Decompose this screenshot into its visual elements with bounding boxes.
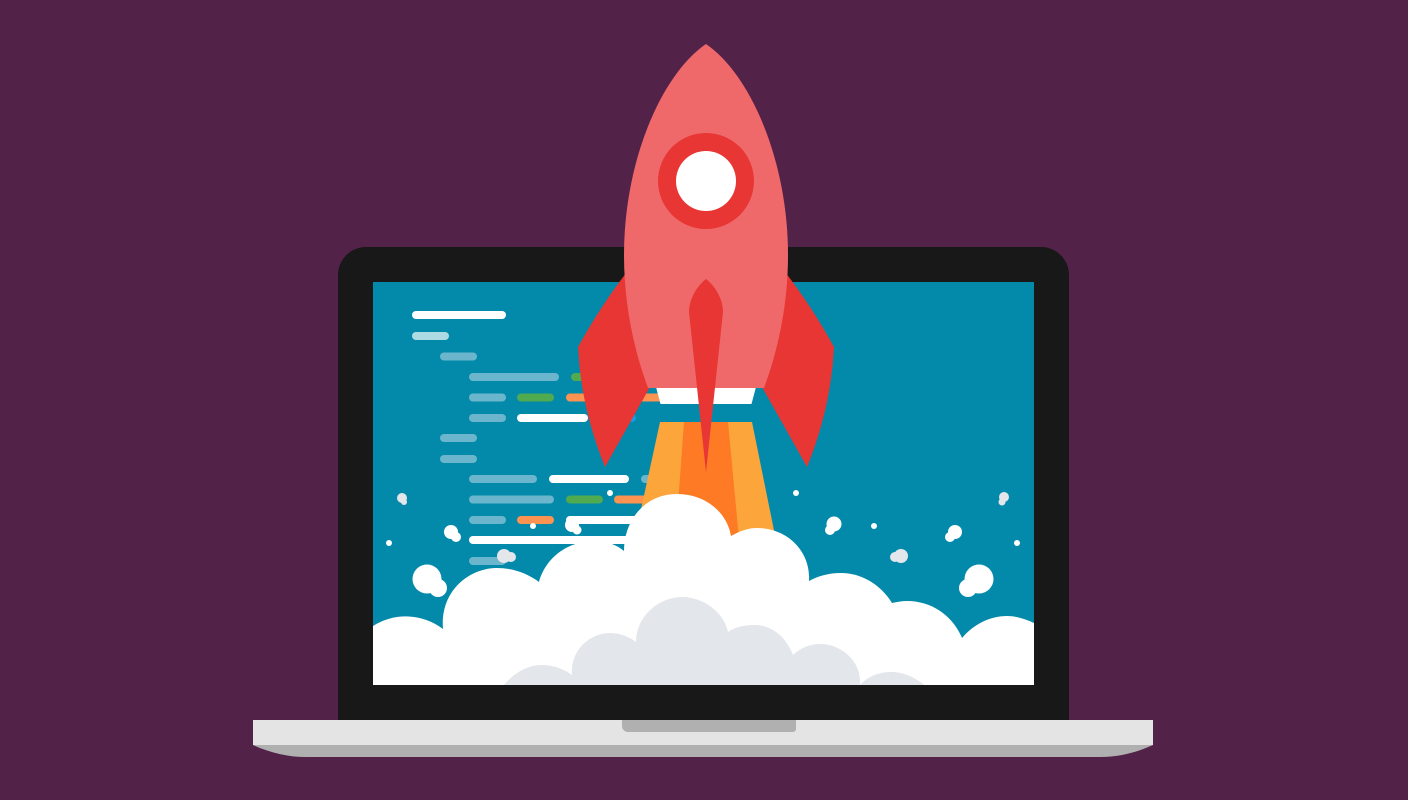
code row 2 (416, 332, 445, 340)
laptop screen (373, 282, 1034, 685)
white puffs (386, 490, 1020, 597)
rocket (578, 44, 834, 560)
rocket left fin (578, 268, 650, 467)
laptop base top (253, 720, 1153, 745)
laptop lid (338, 247, 1069, 720)
laptop base underside (253, 745, 1153, 757)
code row 3 (444, 352, 473, 360)
grey puffs (397, 492, 1009, 563)
rocket body (624, 44, 788, 388)
small smoke puffs (386, 490, 1020, 597)
grey cloud (504, 597, 924, 685)
code row 7 (444, 434, 473, 442)
white cloud (373, 494, 1034, 685)
rocket flame outer (630, 422, 780, 560)
code row 6 (473, 414, 632, 422)
rocket right fin (762, 268, 834, 467)
code row 10 (473, 496, 660, 504)
rocket window ring (658, 133, 754, 229)
code row 9 (473, 475, 660, 483)
laptop notch (622, 720, 796, 732)
code row 13 (473, 557, 502, 565)
laptop (253, 247, 1153, 757)
rocket centre fin (689, 279, 723, 472)
code row 5 (473, 394, 660, 402)
code row 12 (473, 536, 640, 544)
smoke clouds (373, 494, 1034, 685)
rocket window glass (676, 151, 736, 211)
code lines on screen (416, 315, 660, 561)
code row 1 (416, 311, 502, 319)
code row 8 (444, 455, 473, 463)
code row 11 (473, 516, 650, 524)
rocket flame inner (674, 422, 741, 560)
code row 4 (473, 373, 610, 381)
rocket nozzle (656, 387, 756, 404)
